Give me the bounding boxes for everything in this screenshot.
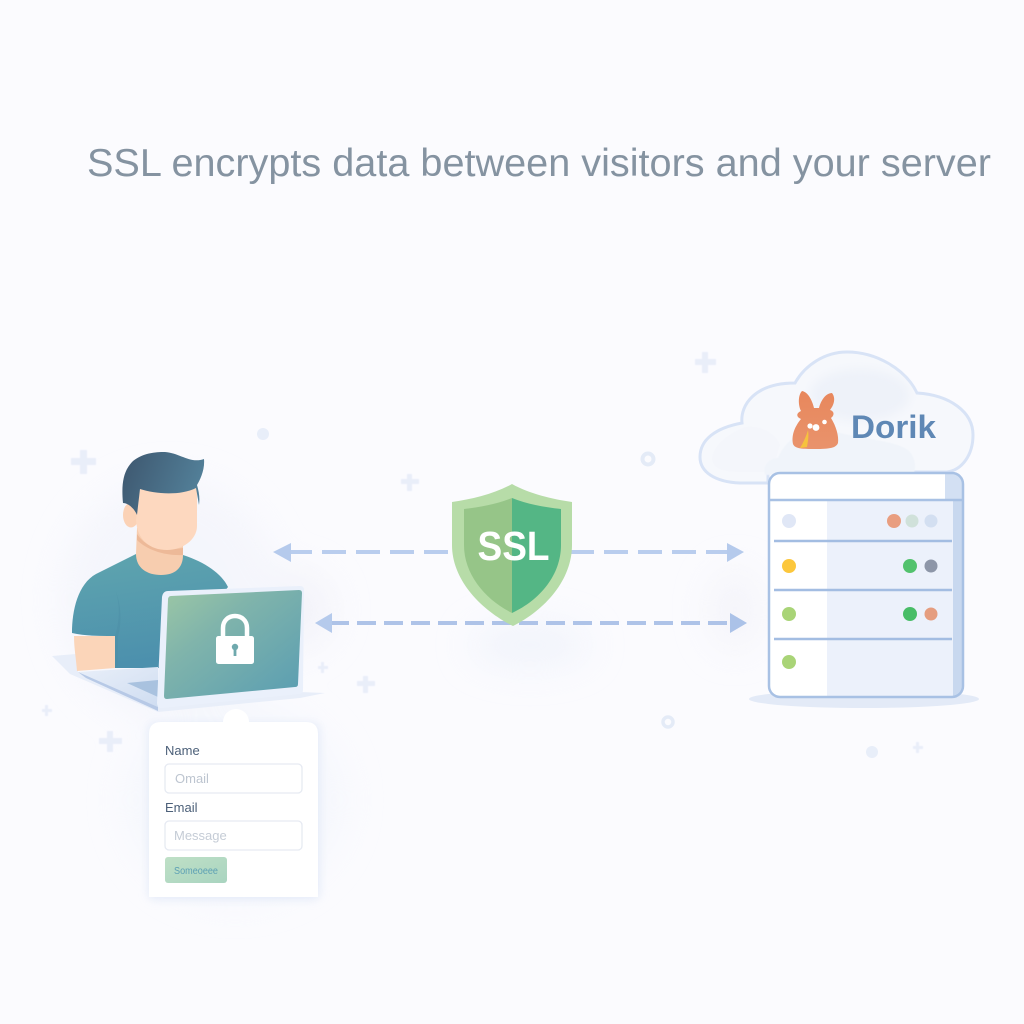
neck [136, 528, 183, 575]
input: second field [165, 821, 302, 850]
title: SSL encrypts data between visitors and your server [87, 142, 991, 185]
button: submit [165, 857, 227, 883]
row 1 indicators [782, 514, 938, 528]
hair [122, 452, 204, 515]
ear [123, 502, 139, 528]
shield label: SSL [478, 523, 550, 569]
server shadow [749, 690, 979, 708]
server rack [749, 473, 979, 708]
panel: contact form [149, 709, 319, 899]
button: submit: Someoeee [174, 866, 218, 877]
label: email: Email [165, 800, 198, 815]
decorative dots and rings [257, 428, 878, 758]
input: second field: Message [174, 828, 227, 843]
logo: Dorik bunny [793, 391, 838, 449]
server body [769, 473, 963, 697]
arm [74, 636, 115, 671]
desk shadow [52, 654, 325, 712]
input: first field [165, 764, 302, 793]
shirt [72, 554, 228, 668]
laptop base [78, 667, 158, 707]
icon: SSL shield [452, 484, 572, 626]
row 4 indicator [782, 655, 796, 669]
input: first field: Omail [175, 771, 209, 786]
arrow: upper dashed two-way connection [273, 543, 744, 562]
row 3 indicators [782, 607, 938, 621]
row 2 indicators [782, 559, 938, 573]
laptop screen [164, 590, 302, 699]
arrow: lower dashed two-way connection [315, 613, 747, 633]
rack dividers [774, 541, 952, 639]
cloud [700, 352, 973, 483]
logo: Dorik wordmark: Dorik [851, 409, 936, 445]
laptop lid [157, 586, 304, 708]
person at laptop [52, 452, 325, 712]
decorative plus icons [42, 352, 923, 753]
icon: padlock [216, 616, 254, 664]
label: name: Name [165, 743, 200, 758]
face [136, 484, 197, 550]
